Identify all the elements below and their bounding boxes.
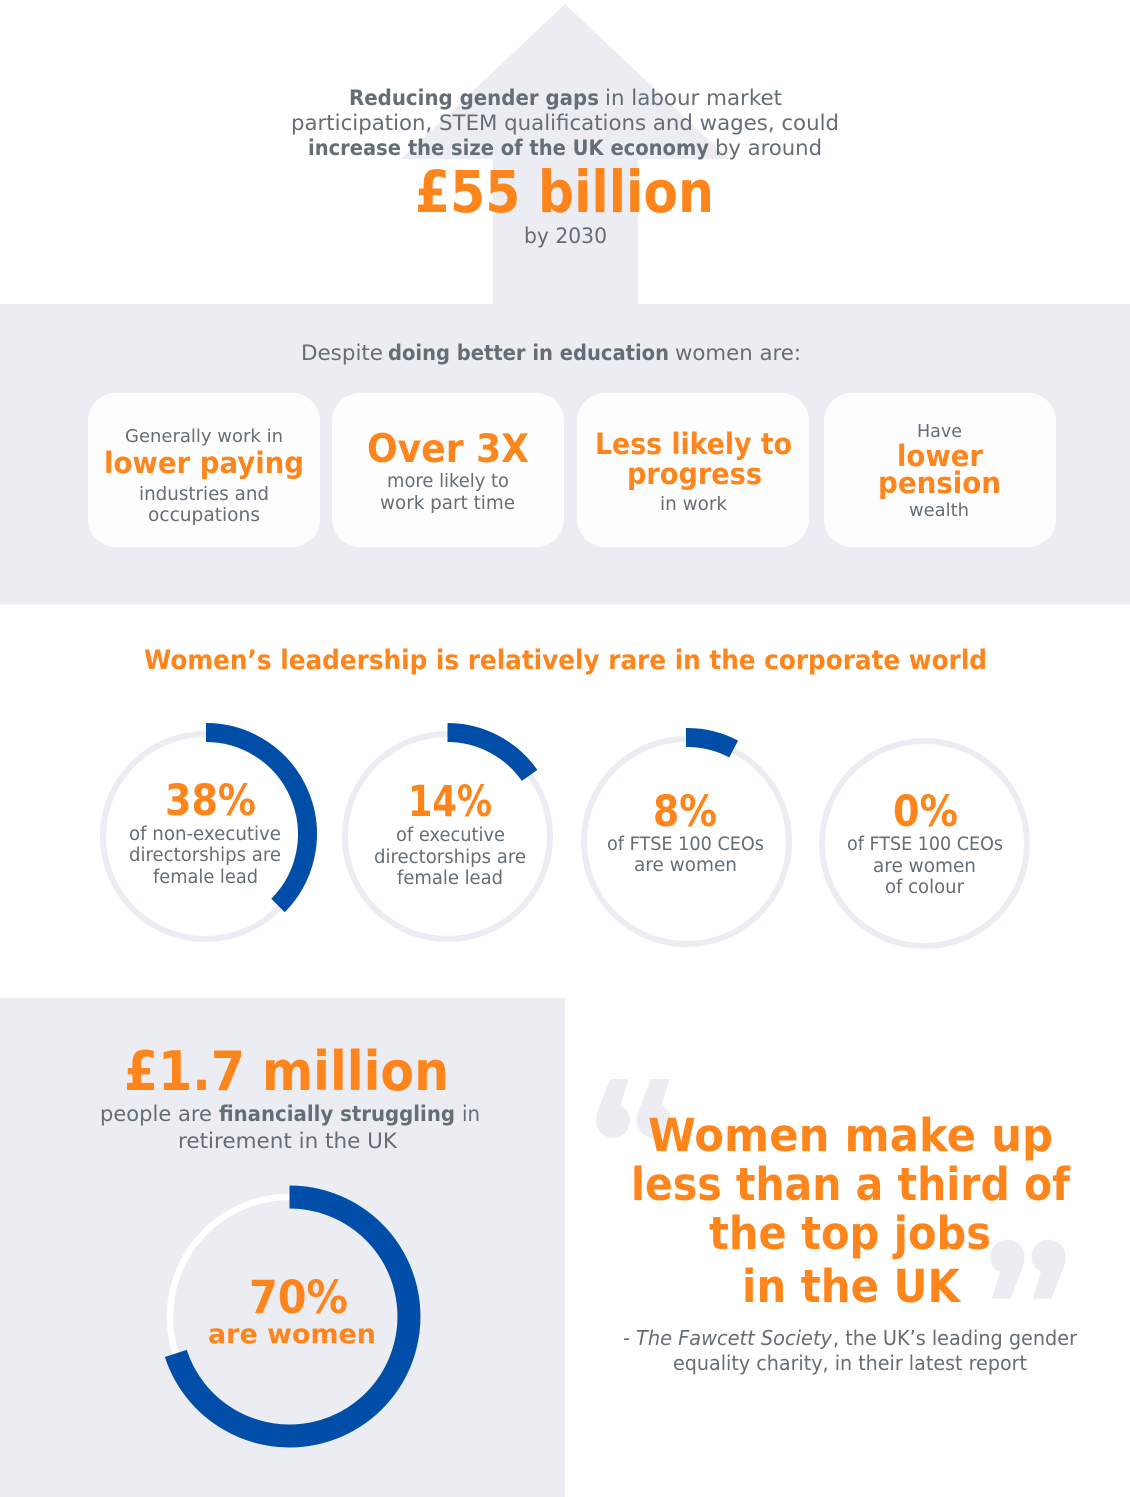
quote attribution: - — [623, 1326, 630, 1350]
quote text: Women make up — [648, 1109, 1053, 1162]
card: over 3X: Over 3X — [367, 427, 529, 472]
card: lower pension: lower — [897, 439, 984, 473]
quote text: the top jobs — [709, 1207, 991, 1260]
icon: upward arrow background — [401, 4, 729, 304]
card: lower pension: pension — [878, 466, 1001, 500]
chart: 14% ring: female lead — [397, 868, 503, 889]
card: less likely to progress: in work — [660, 493, 727, 515]
card: lower pension — [824, 393, 1056, 547]
chart: 0% ring — [822, 741, 1027, 946]
card: over 3X: more likely to — [387, 470, 509, 492]
quote attribution: , the UK’s leading gender — [833, 1326, 1078, 1350]
chart: 0% ring: are women — [873, 856, 976, 877]
intro text block: by around — [715, 136, 822, 160]
chart: 14% ring: 14% — [408, 777, 492, 827]
chart: 0% ring: 0% — [893, 787, 958, 837]
heading: women's leadership: Women’s leadership is relatively rare in the corporate world — [144, 645, 987, 676]
chart: 14% ring: of executive — [396, 825, 505, 846]
icon: opening quote mark — [596, 1079, 671, 1138]
card: lower paying — [88, 393, 320, 547]
caption: by 2030: by 2030 — [524, 224, 607, 248]
card: over 3X — [332, 393, 564, 547]
chart: 0% ring: of FTSE 100 CEOs — [847, 834, 1003, 855]
headline figure: £1.7 million: £1.7 million — [124, 1040, 449, 1103]
chart: 70% ring: are women — [208, 1319, 376, 1350]
text block: financially struggling: in — [462, 1102, 480, 1126]
card: lower paying: occupations — [148, 504, 260, 526]
text block: financially struggling: retirement in the UK — [178, 1129, 398, 1153]
headline figure: £55 billion: £55 billion — [415, 158, 714, 226]
card: lower paying: industries and — [139, 483, 269, 505]
heading: despite doing better — [301, 341, 801, 365]
chart: 14% ring — [345, 732, 550, 939]
card: lower pension: Have — [917, 421, 962, 442]
quote attribution — [623, 1326, 1078, 1375]
heading: despite doing better: doing better in education — [388, 341, 669, 365]
text block: financially struggling — [100, 1102, 480, 1153]
heading: despite doing better: Despite — [301, 341, 383, 365]
chart: 8% ring: are women — [634, 855, 737, 876]
card: lower pension: wealth — [909, 500, 969, 521]
chart: 8% ring — [584, 737, 789, 944]
card: less likely to progress: progress — [627, 457, 762, 491]
chart: 70% ring — [170, 1197, 409, 1436]
chart: 70% ring: 70% — [249, 1271, 348, 1324]
panel: retirement — [0, 998, 565, 1497]
card: lower paying: Generally work in — [125, 426, 283, 447]
chart: 0% ring: of colour — [885, 877, 964, 898]
card: over 3X: work part time — [380, 492, 515, 514]
icon: closing quote mark — [990, 1240, 1066, 1298]
card: less likely to progress — [577, 393, 809, 547]
panel: education band — [0, 304, 1130, 604]
quote text — [631, 1109, 1070, 1313]
quote attribution: The Fawcett Society — [636, 1326, 833, 1350]
intro text block — [291, 86, 839, 160]
quote attribution: equality charity, in their latest report — [673, 1351, 1027, 1375]
chart: 38% ring: 38% — [165, 776, 256, 826]
chart: 8% ring: of FTSE 100 CEOs — [607, 834, 764, 855]
quote text: in the UK — [742, 1260, 962, 1313]
chart: 38% ring: directorships are — [129, 845, 281, 866]
intro text block: increase the size of the UK economy — [308, 136, 709, 160]
intro text block: participation, STEM qualifications and wages, could — [291, 111, 839, 135]
quote text: less than a third of — [631, 1158, 1070, 1211]
text block: financially struggling: people are — [100, 1102, 212, 1126]
card: less likely to progress: Less likely to — [595, 427, 792, 461]
card: lower paying: lower paying — [104, 446, 304, 480]
chart: 8% ring: 8% — [653, 787, 717, 837]
chart: 38% ring: female lead — [153, 867, 258, 888]
chart: 14% ring: directorships are — [374, 847, 526, 868]
chart: 38% ring — [103, 732, 308, 939]
heading: despite doing better: women are: — [675, 341, 801, 365]
intro text block: Reducing gender gaps — [349, 86, 599, 110]
intro text block: in labour market — [605, 86, 782, 110]
chart: 38% ring: of non-executive — [129, 824, 281, 845]
text block: financially struggling: financially struggling — [219, 1102, 455, 1126]
